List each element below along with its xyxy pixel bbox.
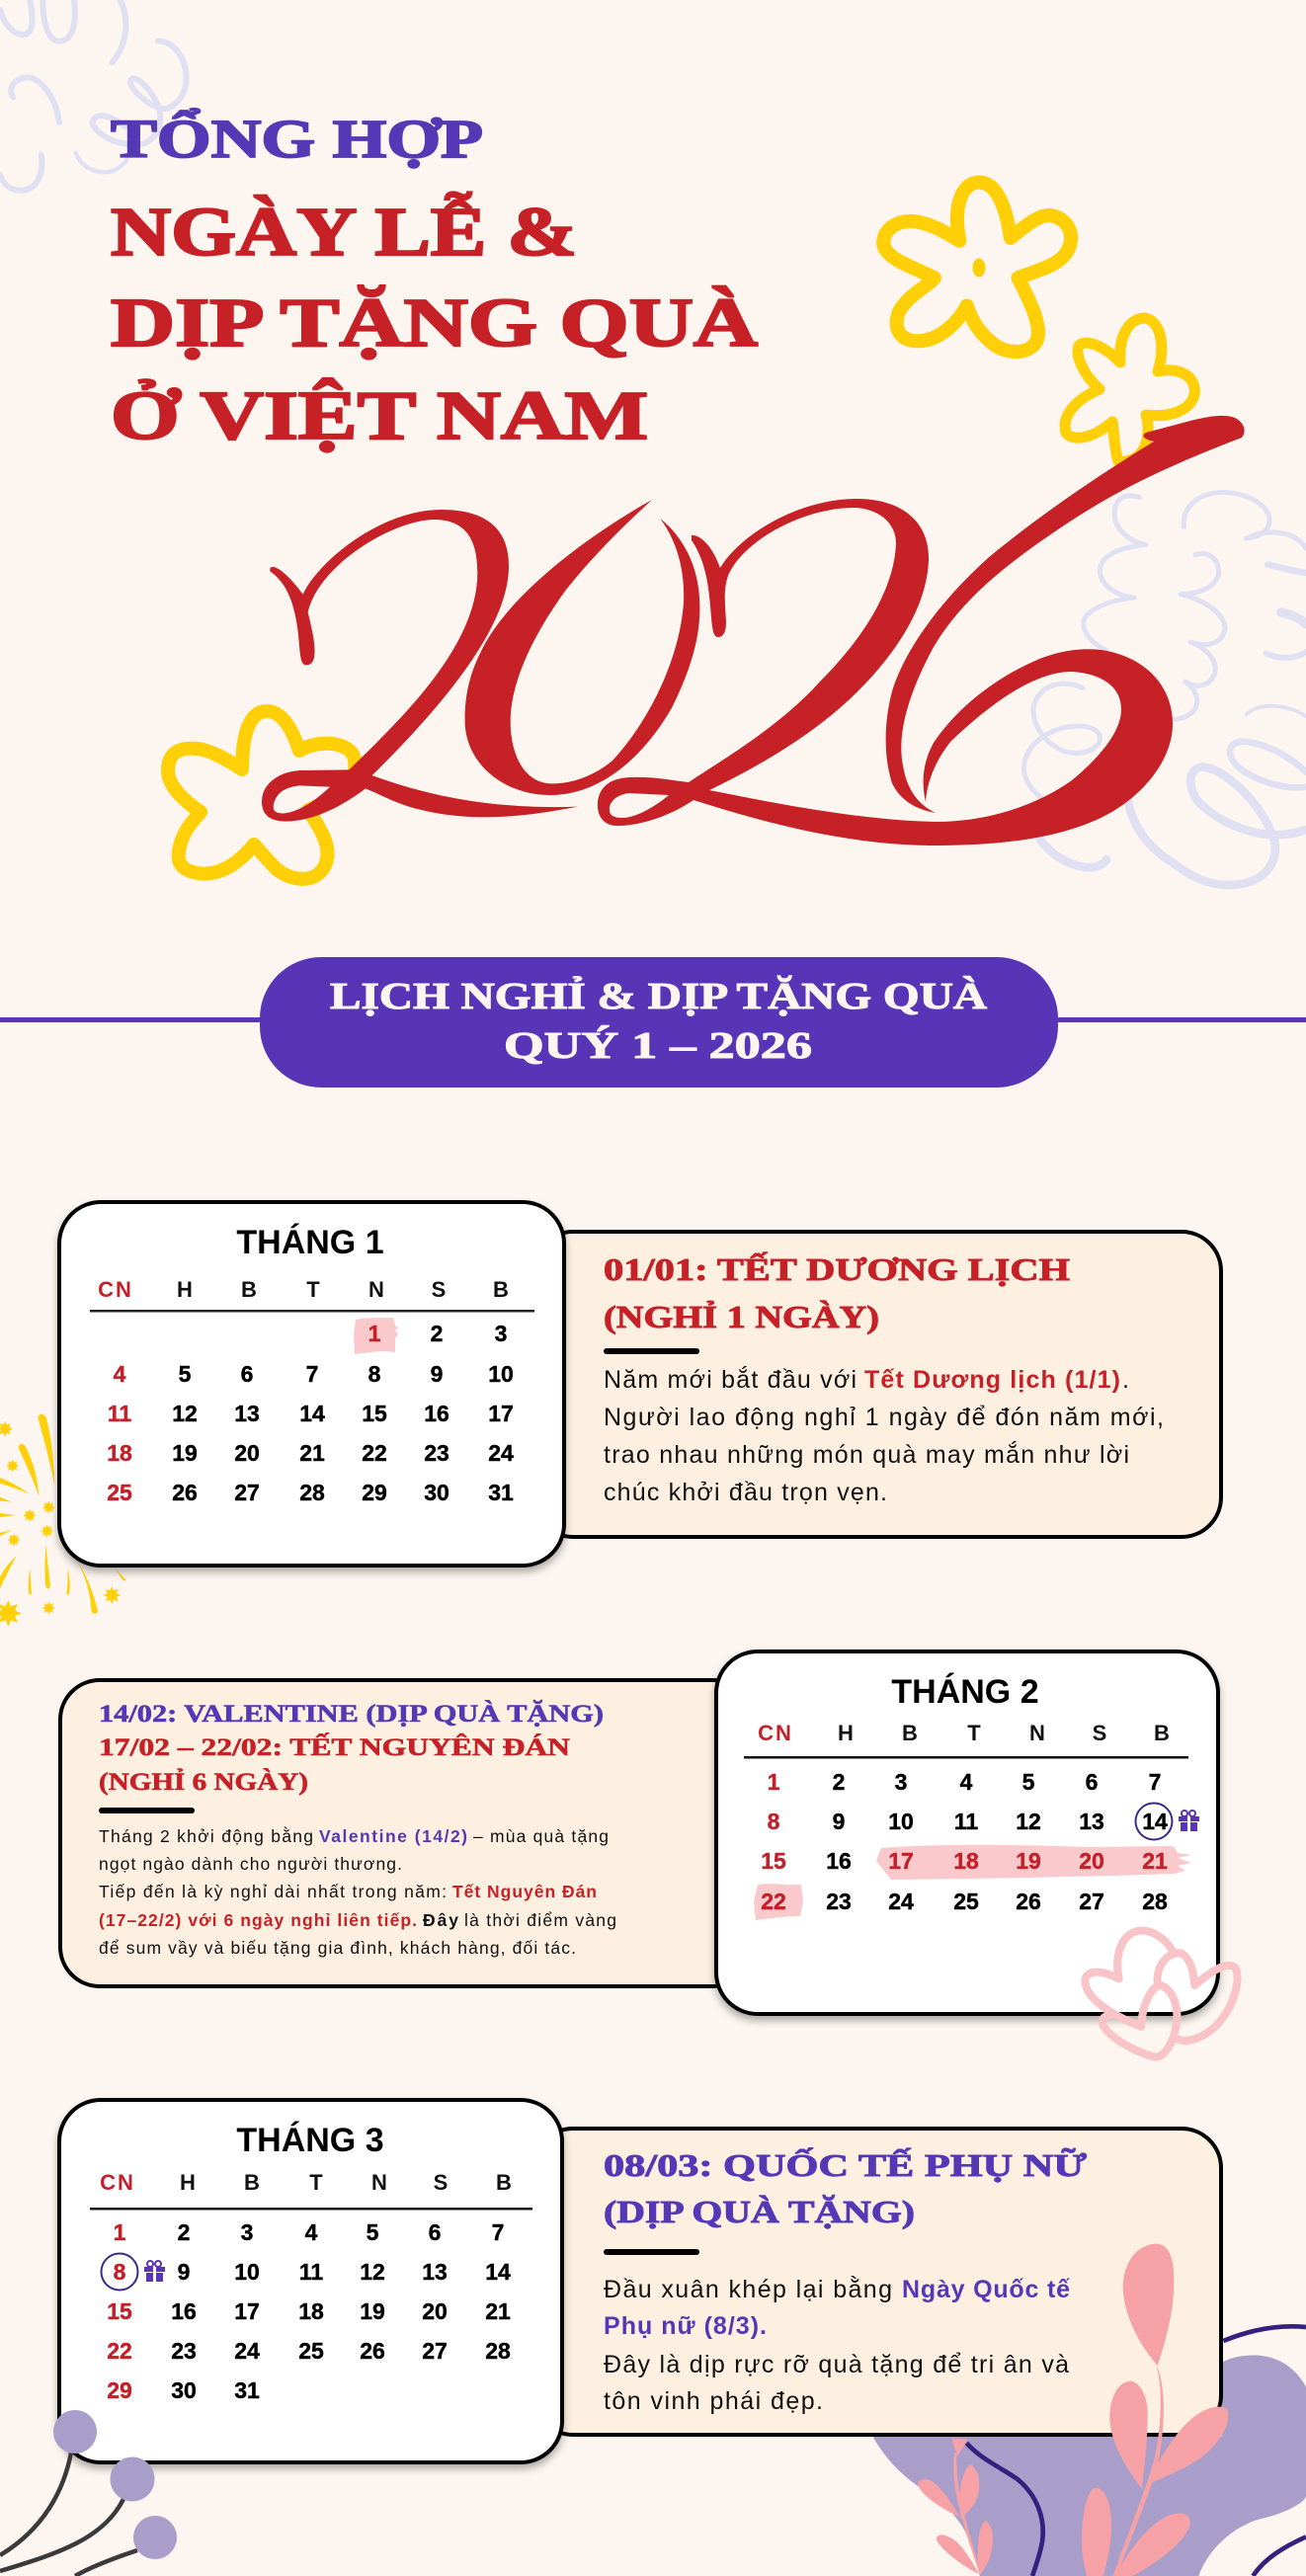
marker: circle around 8: [101, 2254, 138, 2290]
weekday header: T: [967, 1721, 981, 1745]
title line: Dịp tặng quà: DỊP TẶNG QUÀ: [111, 285, 759, 362]
decoration: lavender blob: [872, 2355, 1306, 2576]
dates: 10: [234, 2259, 260, 2285]
decoration: pink leaves: [918, 2244, 1228, 2576]
dates: 18: [298, 2298, 324, 2324]
dates: 17: [888, 1848, 914, 1874]
heading: 01/01: 01/01: TẾT DƯƠNG LỊCH: [604, 1251, 1070, 1287]
dates: 24: [888, 1889, 914, 1914]
dates: 8: [114, 2259, 126, 2285]
dates: 15: [761, 1848, 786, 1874]
dates: 29: [107, 2377, 132, 2403]
weekday header: [758, 1721, 1170, 1745]
dates: 30: [171, 2377, 197, 2403]
heading: gift occasion: (DỊP QUÀ TẶNG): [604, 2194, 915, 2229]
dates: 2: [833, 1769, 845, 1795]
dates: 22: [362, 1440, 387, 1466]
dates: 26: [172, 1480, 198, 1505]
dates: 15: [362, 1401, 387, 1426]
weekday header: [100, 2170, 512, 2195]
body text: Phụ nữ (8/3).: [604, 2312, 767, 2340]
dates: [107, 1321, 514, 1505]
dates: 27: [422, 2338, 448, 2364]
weekday header: B: [1154, 1721, 1170, 1745]
heading: days off: (NGHỈ 6 NGÀY): [99, 1768, 308, 1796]
dates: 22: [761, 1889, 786, 1914]
body text: .: [1122, 1366, 1129, 1394]
dates: 25: [298, 2338, 324, 2364]
dates: 19: [1016, 1848, 1041, 1874]
dates: 3: [241, 2219, 253, 2245]
panel: March note: [533, 2129, 1221, 2435]
weekday header: T: [306, 1277, 320, 1302]
dates: 9: [833, 1809, 845, 1834]
weekday header: CN: [758, 1721, 793, 1745]
weekday header: B: [244, 2170, 260, 2195]
dates: 9: [431, 1361, 443, 1387]
dates: 11: [108, 1401, 131, 1426]
accent rule: [604, 1348, 699, 1354]
dates: [107, 2219, 511, 2403]
highlight: 22 February: [754, 1884, 803, 1920]
title line: Tổng hợp: TỔNG HỢP: [111, 109, 483, 169]
dates: 14: [485, 2259, 511, 2285]
body text: Tết Nguyên Đán: [452, 1882, 597, 1901]
dates: 5: [367, 2219, 379, 2245]
big year lettering 2026: [262, 416, 1245, 845]
dates: 1: [368, 1321, 381, 1346]
dates: 30: [424, 1480, 449, 1505]
weekday header: S: [432, 1277, 446, 1302]
digit: 6 stem: [886, 416, 1245, 813]
dates: 26: [1016, 1889, 1041, 1914]
body text: [604, 2275, 1070, 2415]
dates: 6: [429, 2219, 441, 2245]
dates: 12: [172, 1401, 198, 1426]
weekday header: B: [496, 2170, 512, 2195]
weekday header: [98, 1277, 509, 1302]
dates: 12: [360, 2259, 385, 2285]
dates: 14: [1142, 1809, 1168, 1834]
body text: ngọt ngào dành cho người thương.: [99, 1854, 402, 1874]
digit: second 2 with tail: [598, 499, 1173, 845]
panel: February note: [60, 1680, 752, 1986]
body text: Tháng 2 khởi động bằng: [99, 1825, 313, 1846]
dates: 26: [360, 2338, 385, 2364]
calendar title: THÁNG 2: [891, 1673, 1039, 1711]
dates: 21: [485, 2298, 511, 2324]
icon: small yellow flower: [1065, 318, 1194, 461]
decoration: navy curves: [966, 2326, 1306, 2576]
body text: là thời điểm vàng: [464, 1910, 616, 1930]
dates: 31: [234, 2377, 260, 2403]
dates: 22: [107, 2338, 132, 2364]
dates: 19: [172, 1440, 198, 1466]
section divider line: [0, 1017, 1306, 1022]
dates: 4: [305, 2219, 318, 2245]
dates: 20: [234, 1440, 260, 1466]
dates: 17: [234, 2298, 260, 2324]
weekday header: S: [1093, 1721, 1106, 1745]
body text: [99, 1825, 616, 1958]
dates: 24: [488, 1440, 514, 1466]
dates: 1: [114, 2219, 126, 2245]
calendar: March: [59, 2100, 562, 2462]
body text: Valentine (14/2): [319, 1826, 467, 1846]
dates: 16: [424, 1401, 449, 1426]
pill text line 2: QUÝ 1 – 2026: [504, 1025, 812, 1067]
dates: 4: [960, 1769, 973, 1795]
dates: 13: [1079, 1809, 1104, 1834]
decoration: lavender swirls right: [1023, 492, 1306, 885]
dates: 16: [826, 1848, 852, 1874]
dates: 20: [422, 2298, 448, 2324]
weekday header: CN: [98, 1277, 133, 1302]
weekday header: S: [434, 2170, 448, 2195]
dates: 27: [1079, 1889, 1104, 1914]
panel: January note: [533, 1232, 1221, 1537]
dates: 6: [241, 1361, 253, 1387]
dates: 12: [1016, 1809, 1041, 1834]
dates: 5: [179, 1361, 192, 1387]
dates: 14: [299, 1401, 325, 1426]
dates: 28: [1142, 1889, 1168, 1914]
calendar title: THÁNG 1: [236, 1224, 384, 1261]
weekday header: T: [309, 2170, 323, 2195]
weekday header: N: [1029, 1721, 1045, 1745]
dates: 10: [888, 1809, 914, 1834]
body text: để sum vầy và biếu tặng gia đình, khách hàng, đối tác.: [99, 1938, 576, 1958]
section heading pill: [260, 957, 1058, 1087]
dates: 21: [1142, 1848, 1168, 1874]
body text: Đây là dịp rực rỡ quà tặng để tri ân và: [604, 2351, 1069, 2378]
weekday header: H: [838, 1721, 854, 1745]
accent rule: [604, 2249, 699, 2255]
dates: [761, 1769, 1168, 1914]
icon: gift: [1179, 1811, 1199, 1831]
decoration: fireworks: [0, 1414, 126, 1627]
calendar title: THÁNG 3: [236, 2122, 384, 2159]
weekday header: CN: [100, 2170, 135, 2195]
dates: 5: [1022, 1769, 1035, 1795]
dates: 28: [485, 2338, 511, 2364]
dates: 7: [492, 2219, 504, 2245]
marker: circle around 14: [1136, 1804, 1172, 1839]
digit: 0: [465, 500, 699, 795]
accent rule: [99, 1808, 195, 1813]
dates: 28: [299, 1480, 325, 1505]
body text: Tiếp đến là kỳ nghỉ dài nhất trong năm:: [99, 1882, 447, 1901]
dates: 16: [171, 2298, 197, 2324]
weekday header: H: [180, 2170, 196, 2195]
icon: gift: [144, 2261, 165, 2282]
pill text line 1: LỊCH NGHỈ & DỊP TẶNG QUÀ: [330, 976, 988, 1017]
dates: 27: [234, 1480, 260, 1505]
dates: 23: [424, 1440, 449, 1466]
dates: 4: [114, 1361, 126, 1387]
body text: Ngày Quốc tế: [902, 2276, 1070, 2303]
dates: 29: [362, 1480, 387, 1505]
weekday header: N: [368, 1277, 384, 1302]
dates: 11: [954, 1809, 978, 1834]
dates: 3: [495, 1321, 507, 1346]
dates: 9: [178, 2259, 190, 2285]
dates: 13: [422, 2259, 448, 2285]
dates: 1: [768, 1769, 780, 1795]
dates: 7: [1149, 1769, 1161, 1795]
dates: 8: [368, 1361, 381, 1387]
dates: 31: [488, 1480, 514, 1505]
weekday header: B: [493, 1277, 509, 1302]
dates: 13: [234, 1401, 260, 1426]
dates: 3: [895, 1769, 907, 1795]
dates: 18: [953, 1848, 979, 1874]
dates: 25: [953, 1889, 979, 1914]
heading: 08/03: 08/03: QUỐC TẾ PHỤ NỮ: [604, 2147, 1088, 2183]
title line: Ở Việt Nam: Ở VIỆT NAM: [111, 378, 648, 454]
body text: [604, 1365, 1164, 1506]
dates: 6: [1086, 1769, 1098, 1795]
title: [111, 109, 759, 454]
dates: 21: [299, 1440, 325, 1466]
dates: 17: [488, 1401, 514, 1426]
dates: 23: [171, 2338, 197, 2364]
dates: 2: [178, 2219, 190, 2245]
weekday header: B: [241, 1277, 257, 1302]
dates: 18: [107, 1440, 132, 1466]
dates: 23: [826, 1889, 852, 1914]
icon: pink hearts: [1085, 1931, 1238, 2057]
body text: Người lao động nghỉ 1 ngày để đón năm mới,: [604, 1404, 1164, 1431]
dates: 19: [360, 2298, 385, 2324]
decoration: lavender swirls top left: [0, 0, 186, 191]
dates: 15: [107, 2298, 132, 2324]
body text: (17–22/2) với 6 ngày nghỉ liên tiếp.: [99, 1910, 417, 1930]
dates: 7: [306, 1361, 318, 1387]
body text: Đây: [423, 1910, 458, 1930]
icon: yellow flower bottom left: [168, 711, 355, 879]
body text: tôn vinh phái đẹp.: [604, 2387, 823, 2415]
dates: 20: [1079, 1848, 1104, 1874]
dates: 25: [107, 1480, 132, 1505]
highlight: Tet holiday band: [876, 1845, 1191, 1880]
dates: 11: [299, 2259, 323, 2285]
title line: Ngày lễ: NGÀY LỄ &: [111, 192, 577, 271]
dates: 10: [488, 1361, 514, 1387]
highlight: 1 January: [354, 1318, 398, 1354]
weekday header: B: [902, 1721, 918, 1745]
weekday header: H: [177, 1277, 193, 1302]
icon: yellow flower top right: [883, 183, 1071, 352]
calendar: February: [716, 1651, 1218, 2014]
calendar: January: [59, 1202, 564, 1566]
body text: Đầu xuân khép lại bằng: [604, 2275, 892, 2303]
dates: 8: [768, 1809, 780, 1834]
dates: 2: [431, 1321, 443, 1346]
heading: Valentine: 14/02: VALENTINE (DỊP QUÀ TẶNG): [99, 1700, 604, 1728]
body text: Tết Dương lịch (1/1): [864, 1366, 1120, 1394]
heading: days off: (NGHỈ 1 NGÀY): [604, 1299, 879, 1334]
digit: first 2: [262, 510, 578, 822]
weekday header: N: [371, 2170, 387, 2195]
icon: flower centre dot: [972, 259, 986, 277]
body text: chúc khởi đầu trọn vẹn.: [604, 1479, 887, 1506]
dates: 24: [234, 2338, 260, 2364]
decoration: dandelion stems and buds: [0, 2410, 177, 2576]
body text: trao nhau những món quà may mắn như lời: [604, 1440, 1129, 1469]
body text: – mùa quà tặng: [473, 1826, 609, 1846]
body text: Năm mới bắt đầu với: [604, 1365, 857, 1394]
heading: Tet: 17/02 – 22/02: TẾT NGUYÊN ĐÁN: [99, 1732, 570, 1761]
